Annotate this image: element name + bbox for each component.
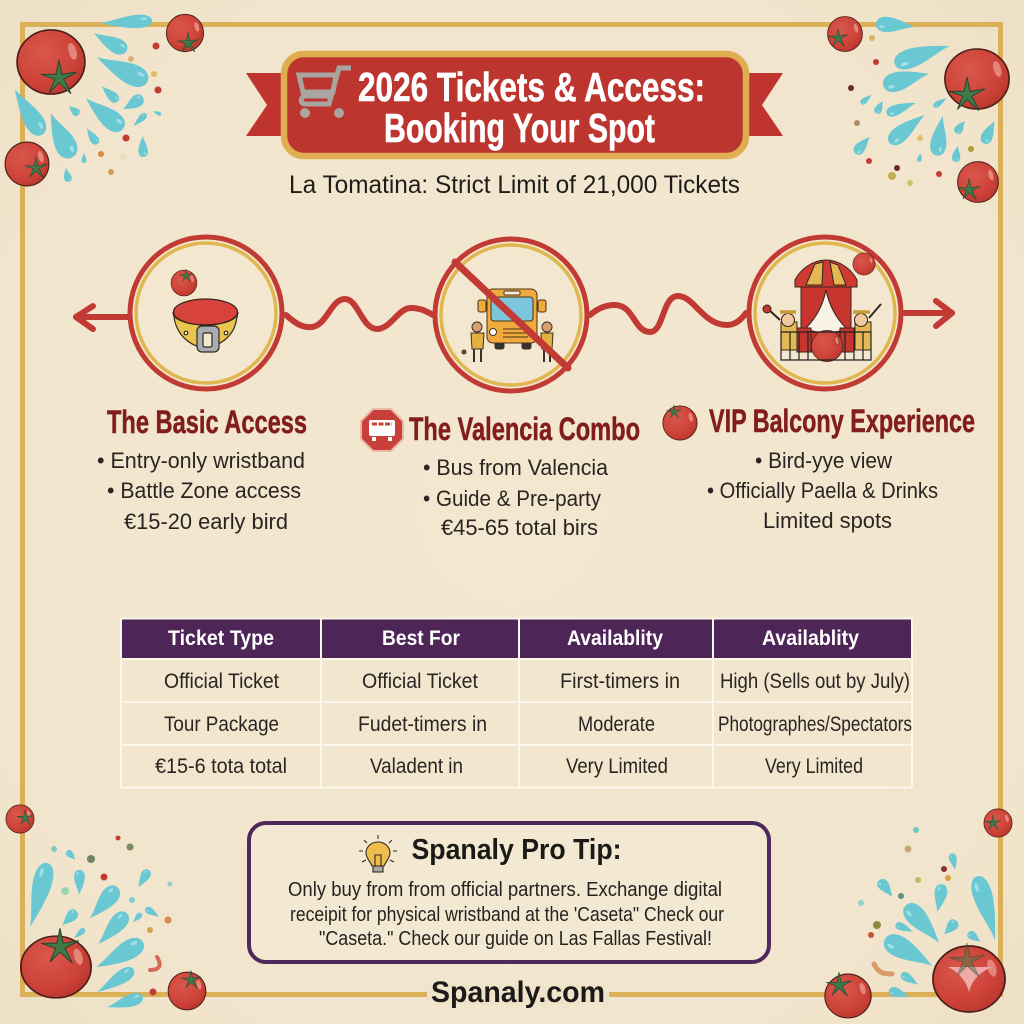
column: the valencia combo: €45-65 total birs: [441, 515, 598, 540]
icon: tomato: [663, 404, 697, 440]
column: vip balcony experience: [663, 403, 975, 533]
callout body: Only buy from from official partners. Exchange digital: [288, 878, 722, 901]
column: the valencia combo: • Guide & Pre-party: [423, 486, 602, 511]
column: the basic access: €15-20 early bird: [124, 509, 288, 534]
circle: valencia combo: [435, 239, 587, 391]
circle: basic access: [130, 237, 282, 389]
arrow: left: [76, 306, 128, 329]
column: the valencia combo: • Bus from Valencia: [423, 455, 608, 480]
corner decoration: top left: [5, 14, 204, 186]
table header: [121, 619, 912, 658]
subtitle: La Tomatina: Strict Limit of 21,000 Tickets: [289, 171, 740, 199]
column: the basic access: The Basic Access: [107, 404, 307, 440]
header labels: Availablity: [567, 626, 663, 650]
row 3: Very Limited: [765, 754, 863, 778]
wave: left to centre: [286, 299, 433, 329]
row 2: Photographes/Spectators: [718, 712, 912, 736]
header labels: [168, 626, 859, 650]
row 3: Very Limited: [566, 754, 668, 778]
corner decoration: top right: [828, 16, 1009, 202]
title text: Booking Your Spot: [384, 105, 655, 151]
row 1: Official Ticket: [362, 669, 478, 693]
column: vip balcony experience: • Officially Paella & Drinks: [707, 478, 938, 503]
header labels: Ticket Type: [168, 626, 274, 650]
row 1: High (Sells out by July): [720, 669, 910, 693]
header labels: Best For: [382, 626, 461, 650]
timeline connector: [76, 296, 952, 332]
icon: wristband: [173, 299, 238, 352]
callout body: receipit for physical wristband at the 'Caseta" Check our: [290, 903, 724, 926]
comparison table: [121, 618, 912, 788]
header labels: Availablity: [762, 626, 859, 650]
icon: balcony with curtains: [763, 260, 881, 362]
column: the basic access: [97, 404, 307, 534]
title banner: [246, 54, 783, 156]
banner ribbon tails: [246, 73, 783, 136]
arrow: right: [904, 301, 952, 326]
row 1: First-timers in: [560, 669, 680, 693]
banner plate: [284, 54, 746, 156]
icon: bus: [478, 289, 546, 349]
corner decoration: bottom left: [6, 805, 206, 1013]
icon: passengers: [462, 322, 553, 362]
column: the valencia combo: [361, 409, 640, 540]
callout body: [288, 878, 724, 950]
icon: shopping cart: [299, 68, 351, 118]
row 1: [164, 669, 910, 693]
footer site name: Spanaly.com: [431, 976, 605, 1009]
column: vip balcony experience: Limited spots: [763, 508, 892, 533]
icon: light bulb: [359, 835, 397, 872]
column: vip balcony experience: • Bird-yye view: [755, 448, 893, 473]
title text: 2026 Tickets & Access:: [358, 64, 705, 110]
table grid: [121, 618, 912, 788]
icon: flying tomato: [853, 253, 875, 275]
column: the valencia combo: The Valencia Combo: [409, 411, 640, 447]
icon: tomato: [171, 269, 197, 296]
row 3: Valadent in: [370, 754, 463, 778]
pro tip callout: [249, 823, 769, 962]
callout heading: Spanaly Pro Tip:: [412, 834, 622, 866]
row 2: [164, 712, 912, 736]
prohibition slash: [455, 262, 568, 368]
title text: [358, 64, 705, 151]
icon: stop sign with bus: [361, 409, 403, 451]
row 1: Official Ticket: [164, 669, 279, 693]
corner decoration: bottom right: [825, 809, 1012, 1018]
row 3: [155, 754, 863, 778]
row 2: Tour Package: [164, 712, 279, 736]
row 3: €15-6 tota total: [155, 754, 287, 778]
callout body: "Caseta." Check our guide on Las Fallas Festival!: [319, 927, 712, 950]
row 2: Fudet-timers in: [358, 712, 487, 736]
wave: centre to right: [590, 296, 746, 332]
column: the basic access: • Entry-only wristband: [97, 448, 305, 473]
circle: vip balcony: [749, 237, 901, 389]
row 2: Moderate: [578, 712, 655, 736]
column: the basic access: • Battle Zone access: [107, 478, 301, 503]
